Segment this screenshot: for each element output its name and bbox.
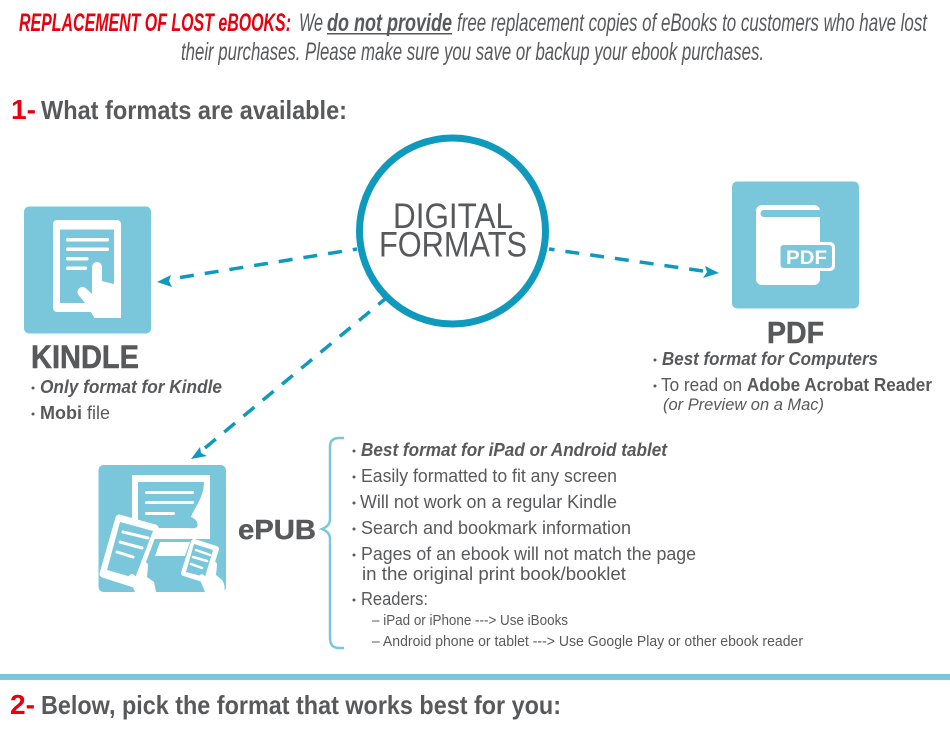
heading: what formats are available: 1-	[11, 94, 36, 125]
PDF feature list: Best format for Computers	[662, 348, 878, 369]
central circle: digital formats: FORMATS	[379, 226, 527, 264]
PDF feature list: To read on Adobe Acrobat Reader	[661, 374, 932, 395]
monitor stand	[155, 542, 190, 556]
heading: pick the format: Below, pick the format that works best for you:	[41, 690, 561, 720]
notice: replacement of lost eBooks: REPLACEMENT OF LOST eBOOKS:	[19, 9, 291, 37]
central circle: digital formats	[360, 138, 546, 324]
central circle: digital formats: DIGITAL	[393, 197, 513, 236]
heading: pick the format: 2-	[10, 689, 35, 720]
icon: Kindle tablet with tapping hand	[24, 206, 151, 334]
ePUB heading: ePUB	[238, 514, 316, 545]
ePUB feature list: Best format for iPad or Android tablet	[361, 439, 668, 460]
notice: replacement of lost eBooks: We	[299, 9, 323, 37]
ePUB feature list: Pages of an ebook will not match the page	[361, 543, 696, 564]
Kindle feature list: Mobi file	[40, 402, 110, 423]
monitor	[132, 475, 210, 539]
Kindle feature list	[32, 376, 222, 423]
tablet	[103, 518, 155, 584]
arrow: digital formats to Kindle	[157, 249, 357, 287]
notice: replacement of lost eBooks: do not provide	[327, 9, 452, 37]
PDF feature list: (or Preview on a Mac)	[663, 395, 824, 414]
arrow: digital formats to PDF	[549, 249, 719, 278]
ePUB feature list: Search and bookmark information	[361, 517, 631, 538]
notice: replacement of lost eBooks	[19, 9, 928, 66]
PDF heading: PDF	[767, 315, 824, 350]
ePUB feature list	[352, 439, 803, 650]
icon: ePUB devices	[98, 465, 226, 592]
divider bar	[0, 674, 950, 680]
brace	[322, 438, 344, 648]
ePUB feature list: Easily formatted to fit any screen	[361, 465, 617, 486]
Kindle heading: KINDLE	[31, 339, 139, 375]
ePUB feature list: Will not work on a regular Kindle	[360, 491, 617, 512]
icon: PDF book	[732, 182, 859, 308]
ePUB feature list: Readers:	[361, 588, 428, 609]
ePUB feature list: in the original print book/booklet	[362, 563, 626, 584]
ePUB feature list: – iPad or iPhone ---> Use iBooks	[372, 613, 568, 629]
PDF feature list	[654, 348, 932, 414]
ePUB feature list: – Android phone or tablet ---> Use Google Play or other ebook reader	[372, 634, 803, 650]
arrow: digital formats to ePUB	[191, 299, 385, 459]
heading: what formats are available: What formats are available:	[41, 95, 347, 125]
icon: PDF book: PDF	[786, 248, 827, 269]
phone	[184, 542, 216, 580]
Kindle feature list: Only format for Kindle	[40, 376, 222, 397]
